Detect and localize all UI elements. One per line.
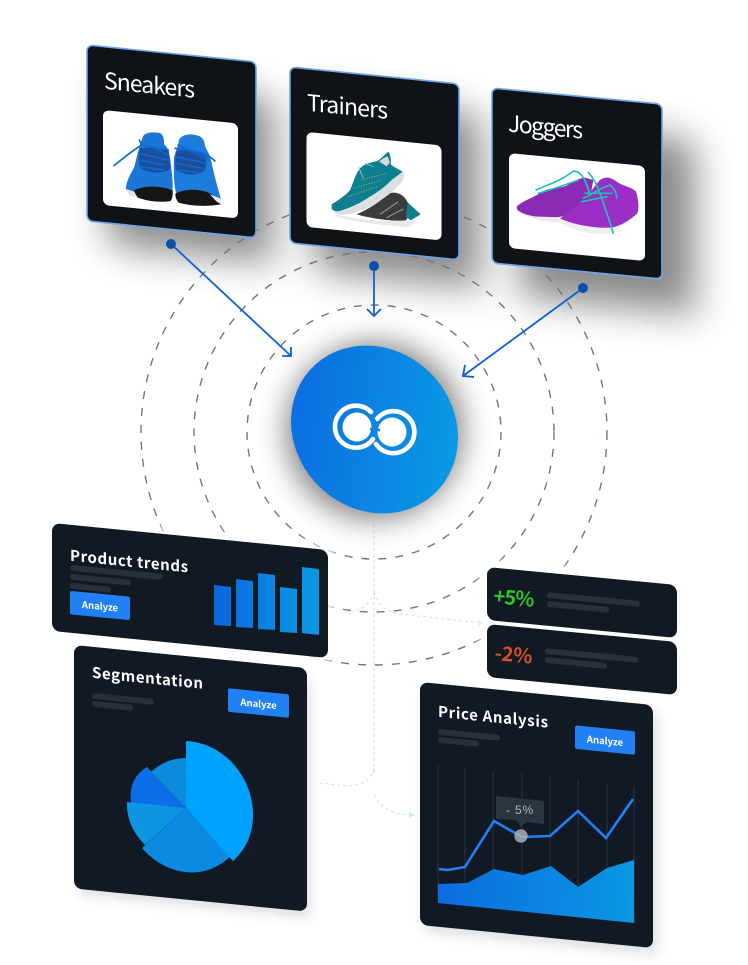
heading: Joggers: Joggers (508, 105, 583, 146)
tooltip (496, 796, 544, 827)
line series (439, 799, 633, 870)
card: Trainers (290, 67, 459, 260)
placeholder text lines (438, 729, 500, 749)
tooltip: - 5% (506, 803, 534, 817)
panel: Price Analysis (420, 682, 653, 948)
card: Joggers (492, 88, 662, 279)
button: Analyze: Analyze (586, 731, 624, 749)
panel: Segmentation (74, 645, 307, 912)
placeholder lines +5% (547, 592, 640, 616)
arrow: Trainers to hub (367, 261, 381, 316)
card: Sneakers (87, 45, 256, 238)
shoe image: purple joggers (517, 171, 638, 234)
button: Analyze (228, 688, 289, 718)
placeholder text lines (70, 565, 163, 598)
heading: Trainers: Trainers (307, 84, 388, 126)
button: Analyze: Analyze (239, 694, 277, 712)
panel: -2% metric (487, 624, 677, 695)
dashed orbit circles (141, 199, 607, 665)
light blue data flow lines (320, 524, 484, 818)
photo panel: joggers (509, 153, 645, 261)
placeholder lines -2% (545, 648, 638, 672)
arrow: Sneakers to hub (166, 239, 291, 356)
heading: Price Analysis: Price Analysis (438, 701, 548, 733)
central hub circle with logo (291, 338, 458, 521)
photo panel: trainers (306, 132, 442, 240)
heading: Product trends: Product trends (70, 545, 188, 577)
area series (438, 860, 634, 923)
line and area chart: price analysis (438, 765, 634, 923)
icon: linked rings logo (335, 406, 414, 453)
heading: Segmentation: Segmentation (92, 662, 203, 694)
button: Analyze (575, 725, 635, 755)
shoe image: blue sneakers (114, 132, 222, 206)
data point marker (514, 829, 528, 843)
panel: +5% metric (487, 567, 677, 638)
heading: Sneakers: Sneakers (104, 62, 195, 105)
placeholder text lines (92, 693, 154, 713)
pie chart: segmentation (127, 741, 253, 872)
button: Analyze: Analyze (81, 597, 119, 615)
metric value +5%: +5% (492, 580, 536, 613)
button: Analyze (70, 591, 130, 620)
panel: Product trends (52, 523, 328, 658)
arrow: Joggers to hub (463, 283, 588, 377)
photo panel: sneakers (103, 110, 238, 218)
shoe image: teal trainers (332, 152, 421, 227)
metric value -2%: -2% (493, 637, 534, 670)
bar chart: product trends (214, 567, 319, 635)
